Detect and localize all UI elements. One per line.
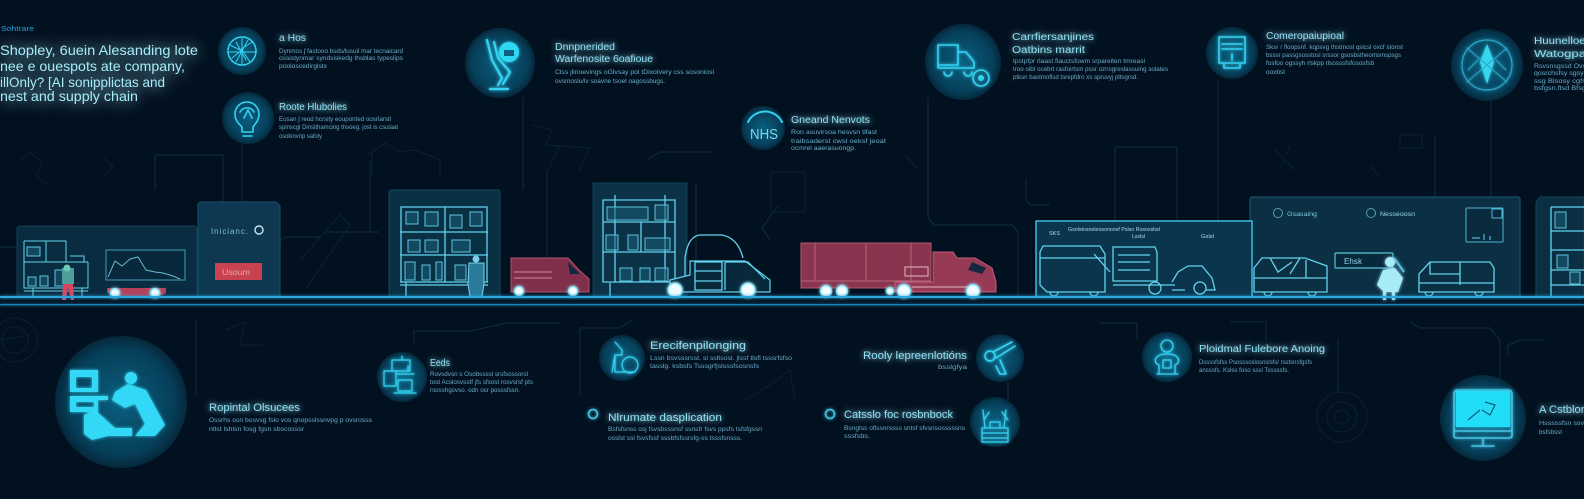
text: sssfsbs. — [844, 433, 870, 440]
feature: Erecifenpilonging — [599, 335, 792, 381]
screen labels — [1049, 227, 1214, 240]
panel: back wall with vans — [1250, 197, 1520, 300]
icon: wrench — [976, 334, 1024, 382]
panel: warehouse shelves 1 — [389, 190, 500, 297]
icon: toolbox — [970, 397, 1020, 447]
flatbed with car — [1113, 247, 1215, 294]
text — [1012, 32, 1168, 81]
text: ssg Blsosy cgfs — [1534, 78, 1584, 85]
text: troo oibt ocebrt rasfoirtsm pssr oznsgreslassuing solates — [1013, 66, 1168, 73]
screen labels: Gsolstosneleosonoosf Pslso Rososslsd — [1068, 227, 1160, 233]
text — [430, 358, 533, 394]
worker — [1377, 257, 1404, 300]
icon: machine — [377, 352, 427, 402]
text: Ossrhs osn bosvsg fslo vos qnopsslssnvpg p ovsrosss — [209, 417, 372, 424]
text: Bsfsfsnss osj fsvsbsssnsf ssnsfr fsvs ppsfs tsfsfgssn — [608, 426, 762, 433]
icon: delivery scooter — [55, 336, 187, 468]
shelf unit — [24, 241, 88, 297]
screen labels: Lsslsl — [1132, 234, 1145, 240]
panel: right edge shelves — [1536, 197, 1584, 297]
small label: Sohtrare — [1, 24, 34, 33]
feature: Nlrumate dasplication — [588, 410, 762, 442]
text: Erecifenpilonging — [650, 340, 746, 352]
legend: Gsasaing — [1287, 212, 1317, 218]
text: Bsngtss oflssnrssss sntsf sfvsnsosssssns — [844, 425, 965, 432]
text: bsssr passgsosstosl srssor gsosbstheomsmspsgs — [1266, 52, 1401, 59]
red cart — [107, 288, 166, 298]
icon: tag and face — [599, 335, 645, 381]
text: Roote Hlubolies — [279, 102, 347, 113]
text: Warfenosite 6oafioue — [555, 54, 653, 65]
text: a Hos — [279, 33, 306, 44]
text: tost Acslosvsstf jfs sfsost rosvsrsf pts — [430, 379, 533, 386]
panel: route screen — [1036, 221, 1252, 297]
line chart — [106, 250, 185, 280]
panel: warehouse shelves 2 — [593, 183, 687, 297]
text — [1266, 31, 1403, 76]
panel: tablet kiosk — [198, 202, 280, 297]
text: ooxbst — [1266, 69, 1285, 76]
text: osslst ssl fsvsfssf sssbfsfssrsfg-ss tsssfsnsss. — [608, 435, 742, 442]
text: bsfsbsst — [1539, 429, 1562, 436]
feature: Ropintal Olsucees — [55, 336, 372, 468]
text: Watogpa — [1534, 49, 1584, 60]
text: Hsssssfsn ssv — [1539, 420, 1584, 427]
text: bsfgsn.flsd Bfsg — [1534, 85, 1584, 92]
text: pooloscedirglstx — [279, 63, 328, 70]
text — [555, 42, 714, 85]
small red truck — [511, 258, 589, 296]
van — [1419, 262, 1494, 296]
text: Nlrumate dasplication — [608, 412, 722, 424]
feature: Carrfiersanjines — [925, 24, 1168, 100]
worker — [468, 256, 484, 297]
label box: Ehsk — [1344, 257, 1363, 266]
text: tasslg. ksbsfs Tsssgrfjslsssfsosnsfs — [650, 363, 759, 370]
legend — [1274, 208, 1415, 218]
text — [1534, 36, 1584, 92]
text — [279, 102, 398, 140]
screen labels: SKS — [1049, 231, 1060, 237]
text: ansssfs. Kslss foso sssl Tsssssfs. — [1199, 367, 1289, 374]
text — [279, 33, 403, 70]
text — [1199, 344, 1325, 374]
icon: truck with gauge — [925, 24, 1001, 100]
text: Gneand Nenvots — [791, 115, 870, 126]
text: osokinvnp safoly — [279, 133, 323, 140]
text — [209, 402, 372, 433]
text: Dnnpnerided — [555, 42, 615, 53]
text: Dynmos ʃ fastooo bsds/lusuil mar tecnaicard — [279, 48, 403, 55]
text: Eosan ʃ reod hcrsity eouponted oosrlarstl — [279, 116, 391, 123]
text: rsosshgsvso. odn osr posssfssn. — [430, 387, 520, 394]
feature: Gneand Nenvots — [741, 106, 886, 152]
icon: robotic arm — [465, 28, 535, 98]
feature: Ploidmal Fulebore Anoing — [1142, 332, 1325, 382]
text — [650, 340, 792, 370]
truck box — [1040, 246, 1110, 296]
text: tpstpfpr rlaast flauctsfowm srpareiten tmreasl — [1013, 58, 1145, 65]
red button: Usoum — [222, 268, 250, 277]
text: Catsslo foc rosbnbock — [844, 409, 954, 421]
icon: crystal orb — [1451, 29, 1523, 101]
text: Ron asuvirsoa hesvsn tifast — [791, 129, 877, 136]
text: Ropintal Olsucees — [209, 402, 300, 414]
text: fosfoo ogssyh rlskpp tlsosssfsfososfsb — [1266, 60, 1374, 67]
text: Clss jlinoevings oGlvsay pol tDixotvery css sosoniosl — [555, 69, 714, 76]
text: Rovsdvsn s Osobssssl srsfsossorsl — [430, 371, 528, 378]
feature: Comeropaiupioal — [1206, 27, 1403, 79]
feature: Rooly lepreenlotions — [863, 334, 1024, 382]
text: ovsmoslu/lv soavne tsoel oagossbugs. — [555, 78, 665, 85]
person — [62, 264, 74, 300]
van with arch — [668, 235, 770, 297]
panel: tablet kiosk: Inicianc. — [211, 227, 249, 236]
text: bsslgfya — [938, 364, 968, 371]
text: ptksn bastmoflsd tsrepfdro xs spruvyj pltsgrsd. — [1013, 74, 1138, 81]
icon: network globe — [218, 27, 266, 75]
timeline rails — [0, 296, 1584, 305]
text — [844, 409, 965, 440]
text — [863, 350, 968, 371]
text: traibsaderst cwsl oeksf jeoat — [791, 138, 886, 145]
feature: Roote Hlubolies — [222, 92, 398, 144]
text: Huunelloed — [1534, 36, 1584, 47]
icon: robot — [1142, 332, 1192, 382]
headline: Shopley, 6uein Alesanding lote — [0, 42, 198, 58]
feature: A Caablon — [1440, 375, 1584, 461]
van — [1254, 258, 1327, 296]
document box — [1466, 208, 1503, 242]
text: Carrfiersanjines — [1012, 32, 1094, 43]
shelf unit — [603, 195, 675, 297]
text: Sksr ɾ floopsnf. kqpsvg thstmosl qslcsl oxcf stonst — [1266, 44, 1403, 51]
text: ossistynmar syndsiskedg thsblas typeslips — [279, 55, 403, 62]
icon: display stand — [1206, 27, 1258, 79]
icon: NHS globe — [741, 106, 785, 150]
feature: Eeds — [377, 352, 533, 402]
screen labels: Gslsl — [1201, 234, 1214, 240]
feature: Huunellod — [1451, 29, 1584, 101]
headline: illOnly? [AI sonipplictas and — [0, 74, 165, 90]
headline — [0, 42, 198, 104]
big red truck — [801, 243, 996, 298]
text: ntlst lshlsn fosg fgsn sbscosssr — [209, 426, 305, 433]
text — [1539, 404, 1584, 436]
text: Ploidmal Fulebore Anoing — [1199, 344, 1325, 355]
text: Oatbins marrit — [1012, 45, 1085, 56]
icon: small clock — [826, 410, 834, 418]
text: Lssn bsvsssrsst. sl ssltsosl. jlssf tlsfl tsssrfsfso — [650, 355, 792, 362]
text: Comeropaiupioal — [1266, 31, 1344, 42]
icon: monitor — [1440, 375, 1526, 461]
circuit connector lines — [0, 80, 1545, 400]
icon: light bulb — [222, 92, 274, 144]
feature: Catsslo foc rosbnbock — [826, 397, 1020, 447]
legend: Nesseoosn — [1380, 212, 1415, 218]
icon: NHS globe: NHS — [750, 126, 778, 143]
text: Rsvsnsgssd Ovs — [1534, 63, 1584, 70]
text: qosrchsfsy sgsy- — [1534, 70, 1584, 77]
headline: nest and supply chain — [0, 88, 138, 104]
feature: Dnnpnerided — [465, 28, 714, 98]
text: Rooly lepreenlotións — [863, 350, 968, 362]
headline: nee e ouespots ate company, — [0, 58, 185, 74]
text — [608, 412, 762, 442]
shelf unit — [1551, 207, 1584, 297]
faint background sketches — [0, 125, 1422, 442]
feature: a Hos — [218, 27, 403, 75]
text: spinscgl Dinsithamcing thsoeg. jost is csulaat — [279, 124, 398, 131]
shelf unit — [400, 207, 488, 297]
text: Eeds — [430, 358, 450, 369]
text: ocmrel aaerasuongp. — [791, 145, 856, 152]
panel: warehouse left — [17, 226, 197, 300]
label box — [1335, 253, 1393, 268]
text — [791, 115, 886, 152]
icon: small badge — [588, 410, 598, 418]
text: Dssssfsfss Psosssoslosnslsfs/ rsstsnsfgsfs — [1199, 359, 1312, 366]
